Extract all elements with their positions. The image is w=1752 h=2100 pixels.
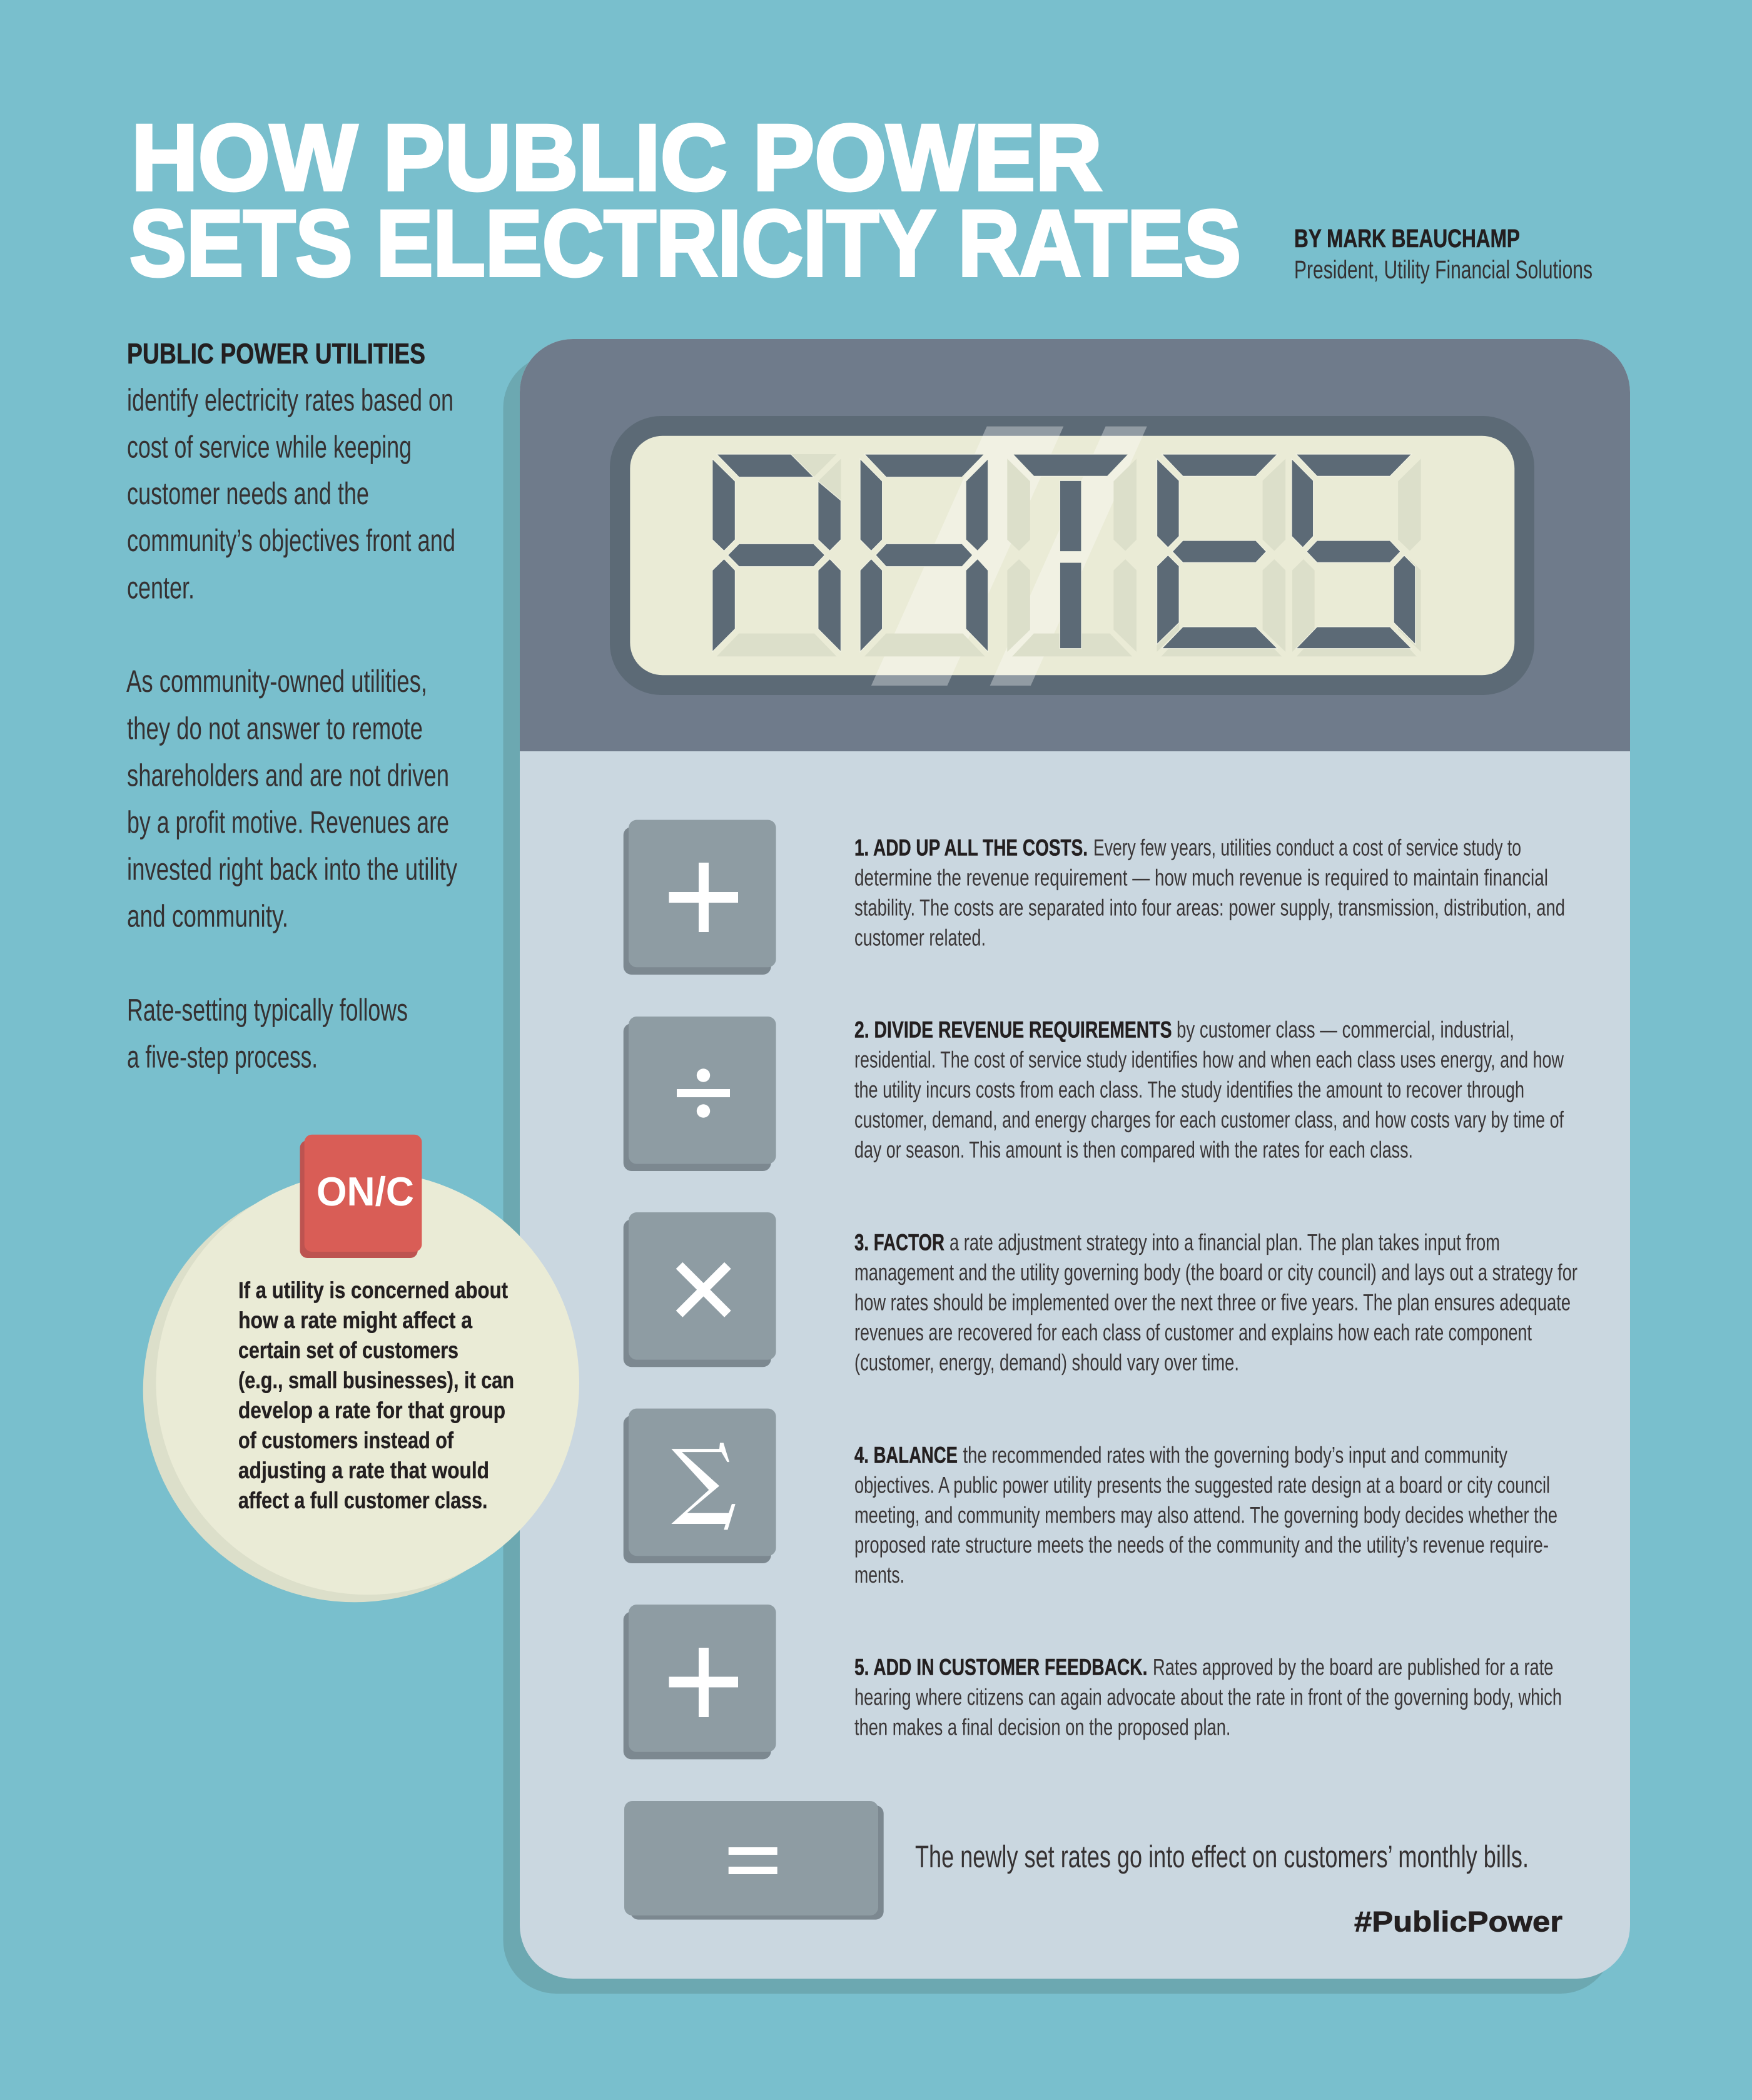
step 4 text: 4. BALANCE [854, 1443, 958, 1468]
intro text block [126, 337, 457, 1075]
step 1 text [854, 834, 1565, 951]
digit: T [1007, 454, 1137, 656]
intro text block: cost of service while keeping [127, 429, 412, 464]
title: HOW PUBLIC POWER [131, 105, 1102, 210]
key: sigma (step 4) [624, 1409, 776, 1563]
step 5 text: then makes a final decision on the proposed plan. [854, 1714, 1231, 1740]
intro text block: center. [127, 571, 195, 606]
intro text block: community’s objectives front and [127, 523, 455, 558]
digit: A [712, 454, 841, 656]
digit: S [1292, 454, 1421, 656]
intro text block: As community-owned utilities, [126, 664, 427, 699]
intro text block: identify electricity rates based on [127, 383, 453, 418]
intro text block: a five-step process. [127, 1040, 318, 1075]
intro text block: by a profit motive. Revenues are [127, 804, 449, 839]
step 5 text [854, 1654, 1562, 1740]
digit: A [860, 454, 988, 656]
title: SETS ELECTRICITY RATES [129, 190, 1241, 295]
key: ON/C [300, 1135, 422, 1258]
step 4 text: ments. [854, 1562, 904, 1588]
callout text: If a utility is concerned about [238, 1277, 508, 1303]
display: RATES readout [610, 416, 1534, 695]
intro text block: shareholders and are not driven [127, 758, 449, 793]
key: multiply (step 3) [624, 1212, 776, 1367]
step 3 text [854, 1230, 1577, 1375]
callout text: develop a rate for that group [238, 1397, 505, 1423]
step 2 text: 2. DIVIDE REVENUE REQUIREMENTS [854, 1017, 1172, 1042]
callout text: (e.g., small businesses), it can [238, 1367, 514, 1393]
callout text [238, 1277, 514, 1513]
step 3 text: a rate adjustment strategy into a financial plan. The plan takes input from [949, 1230, 1500, 1255]
key: divide (step 2) [624, 1017, 776, 1171]
byline: President, Utility Financial Solutions [1294, 255, 1592, 284]
calculator header [520, 339, 1630, 751]
step 5 text: Rates approved by the board are published for a rate [1153, 1654, 1554, 1680]
step 1 text: determine the revenue requirement — how much revenue is required to maintain financial [854, 865, 1548, 891]
panel: calculator [503, 339, 1630, 1994]
key: plus (step 1) [624, 820, 776, 975]
step 2 text: by customer class — commercial, industrial, [1177, 1017, 1514, 1042]
step 3 text: 3. FACTOR [854, 1230, 944, 1255]
callout text: adjusting a rate that would [238, 1458, 489, 1483]
step 1 text: customer related. [854, 925, 986, 951]
step 1 text: Every few years, utilities conduct a cost of service study to [1093, 834, 1521, 861]
byline [1294, 224, 1592, 284]
step 3 text: (customer, energy, demand) should vary over time. [854, 1350, 1239, 1375]
step 1 text: 1. ADD UP ALL THE COSTS. [854, 834, 1088, 861]
step 4 text [854, 1443, 1557, 1588]
callout: circle note [143, 1135, 579, 1602]
key: equals [624, 1801, 884, 1920]
digit: E [1157, 454, 1285, 656]
intro text block: they do not answer to remote [127, 711, 423, 746]
callout text: of customers instead of [238, 1428, 454, 1453]
screen glare [871, 427, 1147, 686]
step 2 text: the utility incurs costs from each class. The study identifies the amount to recover through [854, 1077, 1524, 1102]
callout text: how a rate might affect a [238, 1307, 472, 1333]
result text: The newly set rates go into effect on customers’ monthly bills. [915, 1839, 1529, 1874]
byline: BY MARK BEAUCHAMP [1294, 224, 1520, 253]
step 5 text: 5. ADD IN CUSTOMER FEEDBACK. [854, 1654, 1147, 1680]
step 2 text: day or season. This amount is then compared with the rates for each class. [854, 1137, 1413, 1162]
key: plus (step 5) [624, 1605, 776, 1759]
intro text block: Rate-setting typically follows [127, 992, 408, 1027]
intro text block: and community. [127, 898, 288, 933]
intro text block: PUBLIC POWER UTILITIES [127, 337, 425, 370]
key: ON/C: ON/C [316, 1169, 414, 1214]
callout text: certain set of customers [238, 1337, 458, 1363]
title [129, 105, 1241, 295]
intro text block: customer needs and the [127, 476, 369, 511]
step 2 text [854, 1017, 1564, 1162]
hashtag: #PublicPower [1354, 1905, 1562, 1938]
intro text block: invested right back into the utility [127, 852, 457, 887]
step 4 text: the recommended rates with the governing body’s input and community [963, 1443, 1507, 1468]
callout text: affect a full customer class. [238, 1488, 488, 1513]
